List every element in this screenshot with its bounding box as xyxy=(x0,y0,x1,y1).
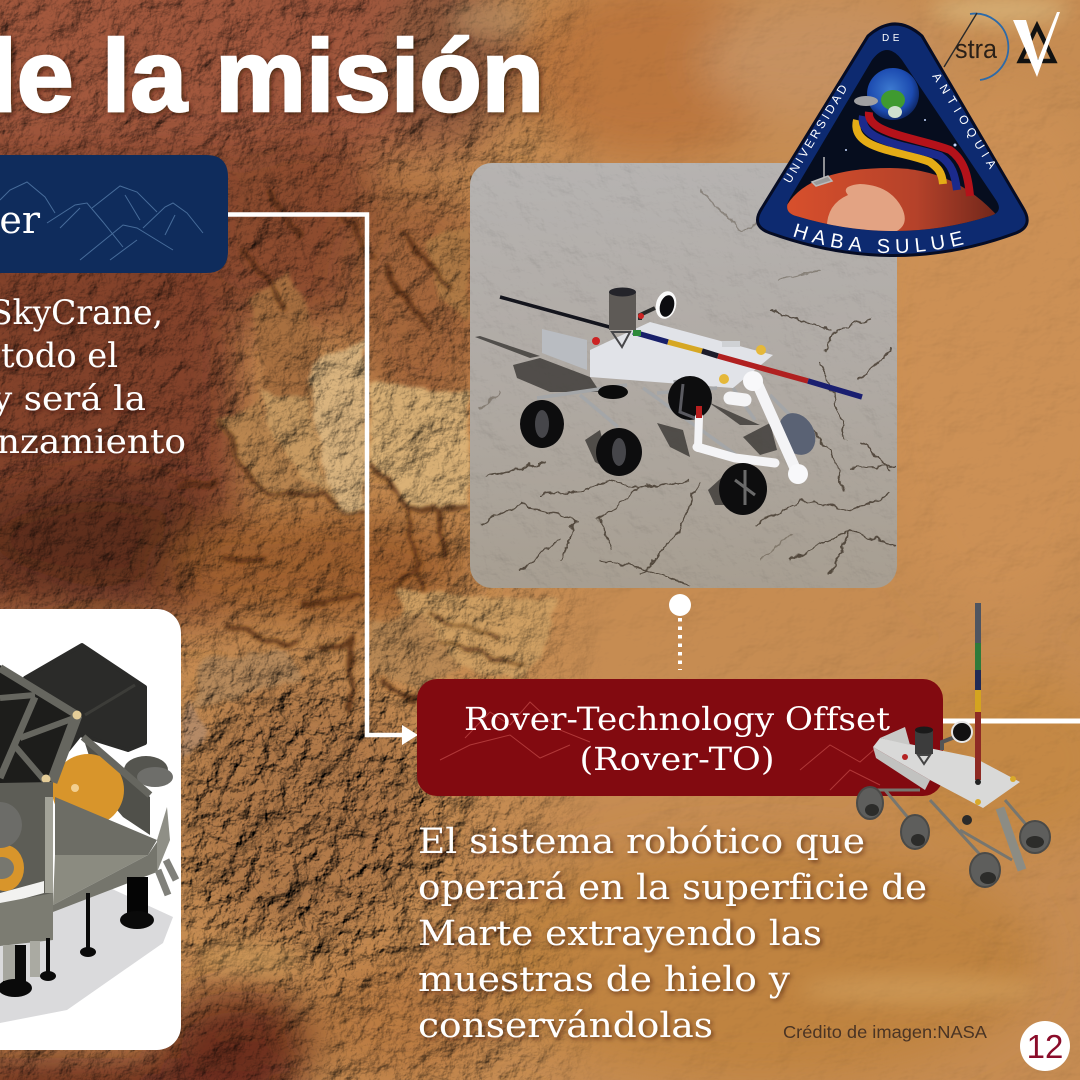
image credit: Crédito de imagen:NASA xyxy=(783,1022,987,1042)
patch: colour stripes xyxy=(856,112,970,196)
page number: 12 xyxy=(1027,1028,1063,1065)
page number xyxy=(1020,1021,1070,1071)
rover in photo xyxy=(500,288,862,515)
mission patch: Haba Sulue: HABA SULUE xyxy=(794,224,964,254)
mission patch: Haba Sulue xyxy=(756,22,1029,257)
mission patch: Haba Sulue: UNIVERSIDAD xyxy=(783,86,846,182)
text block: rover description: muestras de hielo y xyxy=(418,960,790,1000)
patch inner scene xyxy=(787,50,999,231)
text block: lander description: todo el xyxy=(1,336,118,376)
mission patch: Haba Sulue: ANTIOQUIA xyxy=(932,74,996,170)
text block: rover description: operará en la superficie de xyxy=(418,868,927,908)
logo: Astra xyxy=(944,13,1008,80)
logo: Astra: stra xyxy=(955,34,998,64)
text block: rover description xyxy=(418,822,927,1046)
connector: rover box to right edge xyxy=(943,718,1080,724)
connector: lander to rover xyxy=(228,214,418,745)
panel: lander label xyxy=(0,155,228,273)
panel: rover technology offset: Rover-Technology Offset xyxy=(464,700,890,738)
dotted connector: photo to rover box xyxy=(669,594,691,670)
rover wheels xyxy=(857,787,1050,887)
rover shadows xyxy=(475,336,777,505)
lander legs xyxy=(0,877,154,997)
rover render on terrain xyxy=(857,603,1050,887)
mission patch: Haba Sulue: DE xyxy=(882,33,903,44)
lander ground shadow xyxy=(0,888,173,1023)
photo: rover on cracked ground xyxy=(470,163,897,588)
lander body xyxy=(0,645,176,946)
text block: rover description: El sistema robótico que xyxy=(418,822,865,862)
panel: lander render xyxy=(0,609,181,1050)
text block: lander description xyxy=(0,293,186,462)
logo: triangle and V xyxy=(1013,12,1060,77)
patch: mars xyxy=(787,168,996,231)
text block: rover description: conservándolas xyxy=(418,1006,713,1046)
panel: rover technology offset xyxy=(417,679,943,796)
panel: rover technology offset: (Rover-TO) xyxy=(580,740,774,778)
patch: small rover xyxy=(812,157,832,186)
text block: rover description: Marte extrayendo las xyxy=(418,914,822,954)
patch: earth xyxy=(867,68,919,120)
